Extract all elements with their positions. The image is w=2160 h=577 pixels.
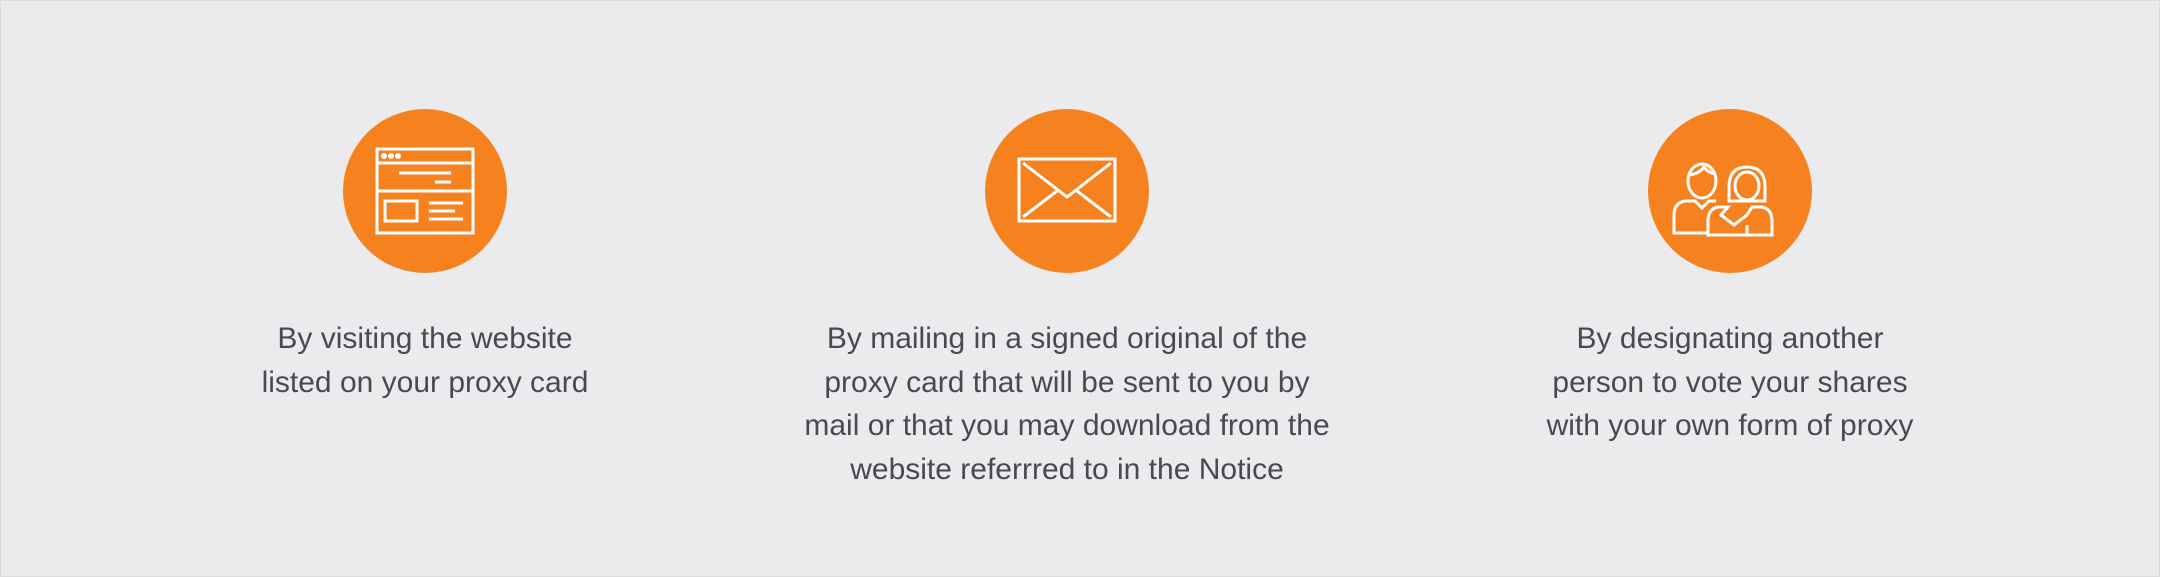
text: mail: [804, 322, 1330, 486]
icon: envelope: [985, 109, 1149, 273]
text: designate: person to vote your shares: [1552, 366, 1908, 398]
text: mail: proxy card that will be sent to you by: [824, 366, 1310, 398]
text: website: listed on your proxy card: [262, 366, 588, 398]
text: website: [262, 322, 588, 398]
icon: website: [343, 109, 507, 273]
text: mail: website referrred to in the Notice: [850, 452, 1284, 486]
text: mail: mail or that you may download from the: [804, 409, 1330, 442]
text: mail: By mailing in a signed original of the: [827, 322, 1307, 355]
icon: people: [1648, 109, 1812, 273]
text: website: By visiting the website: [277, 322, 573, 355]
text: designate: [1546, 322, 1914, 442]
text: designate: By designating another: [1577, 322, 1883, 355]
text: designate: with your own form of proxy: [1547, 409, 1913, 442]
